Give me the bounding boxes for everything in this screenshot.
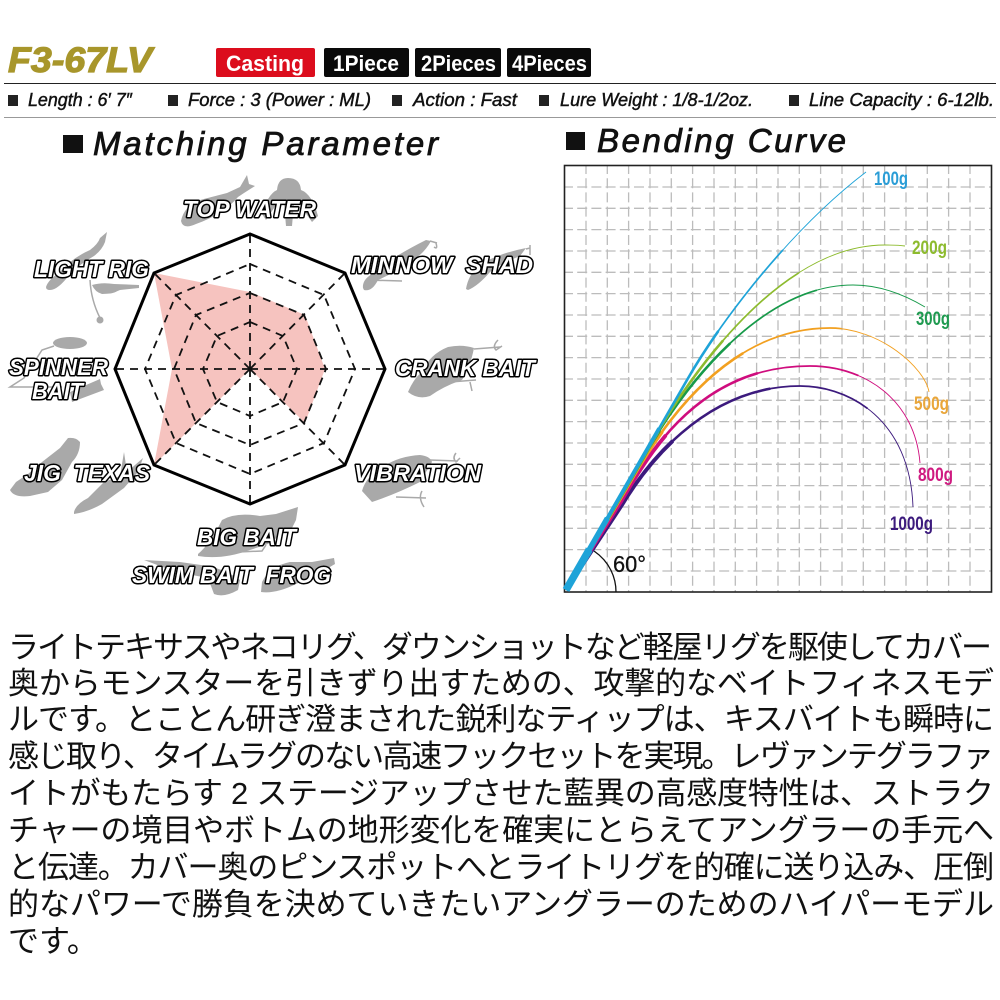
radar value area: [154, 273, 325, 465]
curve weight labels: 500g: [914, 394, 949, 415]
curve: 500g: [566, 328, 929, 590]
radar axis labels: [9, 196, 537, 588]
icon: light rig shad: [92, 283, 139, 294]
icon: swim bait: [144, 560, 240, 595]
description text block: ライトテキサスやネコリグ、ダウンショットなど軽屋リグを駆使してカバー: [8, 630, 992, 665]
description text block: 的なパワーで勝負を決めていきたいアングラーのためのハイパーモデル: [8, 887, 994, 922]
badges: casting and piece count: [216, 48, 591, 77]
specification row: Action : Fast: [412, 90, 518, 110]
angle arc and label: [594, 551, 646, 592]
badges: casting and piece count: Casting: [226, 51, 304, 76]
curve: 100g: [566, 172, 866, 590]
description text block: ルです。とことん研ぎ澄まされた鋭利なティップは、キスバイトも瞬時に: [8, 702, 994, 737]
curve: 800g: [566, 366, 920, 590]
badges: casting and piece count: 1Piece: [333, 51, 399, 76]
description text block: [8, 630, 994, 959]
icon: top water popper: [181, 175, 255, 226]
icon: texas rig: [74, 452, 143, 514]
badges: casting and piece count: 4Pieces: [512, 51, 587, 76]
curve weight labels: [874, 169, 953, 535]
icon: big bait: [198, 507, 298, 557]
icon: frog: [261, 558, 335, 592]
radar axis labels: SWIM BAIT FROG: [132, 562, 331, 588]
specification row: Force : 3 (Power : ML): [188, 90, 371, 110]
icon: top water frog: [262, 178, 318, 226]
radar chart: matching parameter: [115, 234, 385, 504]
icon: light rig worm: [46, 232, 107, 290]
radar axis labels: CRANK BAIT: [395, 355, 537, 381]
chart frame: [564, 166, 992, 592]
curve weight labels: 100g: [874, 169, 908, 190]
radar axis labels: SPINNER: [9, 354, 108, 380]
radar axis labels: LIGHT RIG: [34, 256, 149, 282]
radar axis labels: BIG BAIT: [197, 524, 298, 550]
icon: spinner bait: [10, 337, 104, 402]
icon: light rig hook and sinker: [90, 280, 116, 324]
angle arc and label: 60°: [613, 551, 646, 577]
specification row: Line Capacity : 6-12lb.: [809, 90, 994, 110]
curve: 300g: [566, 285, 925, 590]
curve: 200g: [566, 245, 905, 590]
icon: minnow: [363, 240, 437, 290]
chart grid: [565, 166, 992, 592]
specification row: Lure Weight : 1/8-1/2oz.: [560, 90, 753, 110]
title: model name: F3-67LV: [8, 41, 155, 80]
radar axis labels: BAIT: [32, 378, 85, 404]
lure silhouettes: [10, 175, 530, 595]
curve weight labels: 800g: [918, 465, 953, 486]
specification row: Length : 6′ 7″: [28, 90, 133, 110]
badges: casting and piece count: 2Pieces: [421, 51, 496, 76]
icon: jig: [10, 438, 80, 496]
curve weight labels: 1000g: [890, 514, 933, 535]
icon: crank bait: [408, 340, 502, 397]
description text block: 奥からモンスターを引きずり出すための、攻撃的なベイトフィネスモデ: [8, 666, 994, 701]
description text block: と伝達。カバー奥のピンスポットへとライトリグを的確に送り込み、圧倒: [8, 850, 994, 885]
icon: shad: [466, 245, 530, 290]
description text block: チャーの境目やボトムの地形変化を確実にとらえてアングラーの手元へ: [8, 813, 994, 848]
specification row: [8, 90, 994, 110]
curve weight labels: 300g: [916, 309, 950, 330]
curve: 1000g: [566, 386, 913, 590]
radar dashed rings and axes: [115, 234, 385, 504]
curve weight labels: 200g: [912, 238, 947, 259]
radar axis labels: VIBRATION: [354, 460, 481, 486]
radar axis labels: JIG TEXAS: [24, 460, 151, 486]
radar outer octagon: [115, 234, 385, 504]
heading: bending curve: Bending Curve: [597, 122, 846, 159]
description text block: です。: [8, 924, 98, 959]
icon: vibration lure: [362, 453, 460, 507]
description text block: 感じ取り、タイムラグのない高速フックセットを実現。レヴァンテグラファ: [8, 739, 994, 774]
description text block: イトがもたらす 2 ステージアップさせた藍異の高感度特性は、ストラク: [8, 776, 994, 811]
bending curve chart: [564, 166, 992, 592]
heading: matching parameter: Matching Parameter: [93, 125, 440, 162]
radar axis labels: TOP WATER: [183, 196, 316, 222]
radar axis labels: MINNOW SHAD: [351, 252, 533, 278]
